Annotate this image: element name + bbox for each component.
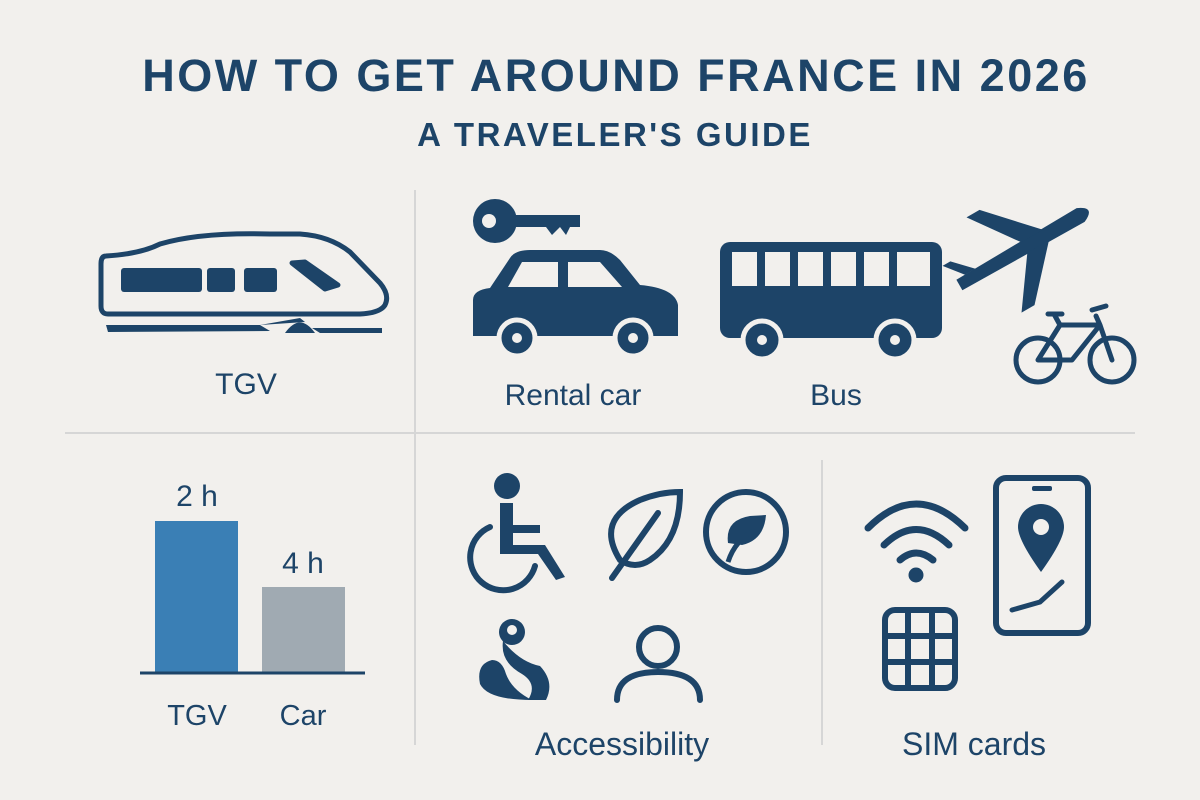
bar chart: [140, 480, 365, 732]
icon: person: [617, 628, 700, 700]
icon: assistance figure: [479, 619, 549, 700]
icon: leaf in circle: [706, 492, 786, 572]
icon: leaf: [611, 492, 680, 578]
bar chart: 4 h: [282, 547, 324, 580]
bar chart: 2 h: [176, 480, 218, 513]
bar chart: TGV: [167, 700, 227, 732]
title: HOW TO GET AROUND FRANCE IN 2026: [142, 50, 1090, 101]
bar chart: Car: [280, 700, 327, 732]
icon: SIM card: [885, 610, 955, 688]
label: Bus: Bus: [810, 379, 862, 412]
icon: plane: [928, 163, 1116, 335]
icon: TGV train: [101, 234, 387, 333]
icon: bus: [720, 242, 942, 359]
icon: rental car: [473, 250, 678, 356]
icon: key: [473, 199, 580, 243]
icon: wheelchair: [470, 473, 565, 590]
icon: phone with map pin: [996, 478, 1088, 633]
label: Rental car: Rental car: [505, 379, 641, 412]
subtitle: A TRAVELER'S GUIDE: [417, 116, 813, 153]
icon: wifi: [868, 504, 965, 579]
icon: bicycle: [1016, 306, 1134, 382]
label: Accessibility: Accessibility: [535, 726, 709, 762]
label: TGV: TGV: [215, 368, 277, 401]
label: SIM cards: SIM cards: [902, 726, 1046, 762]
